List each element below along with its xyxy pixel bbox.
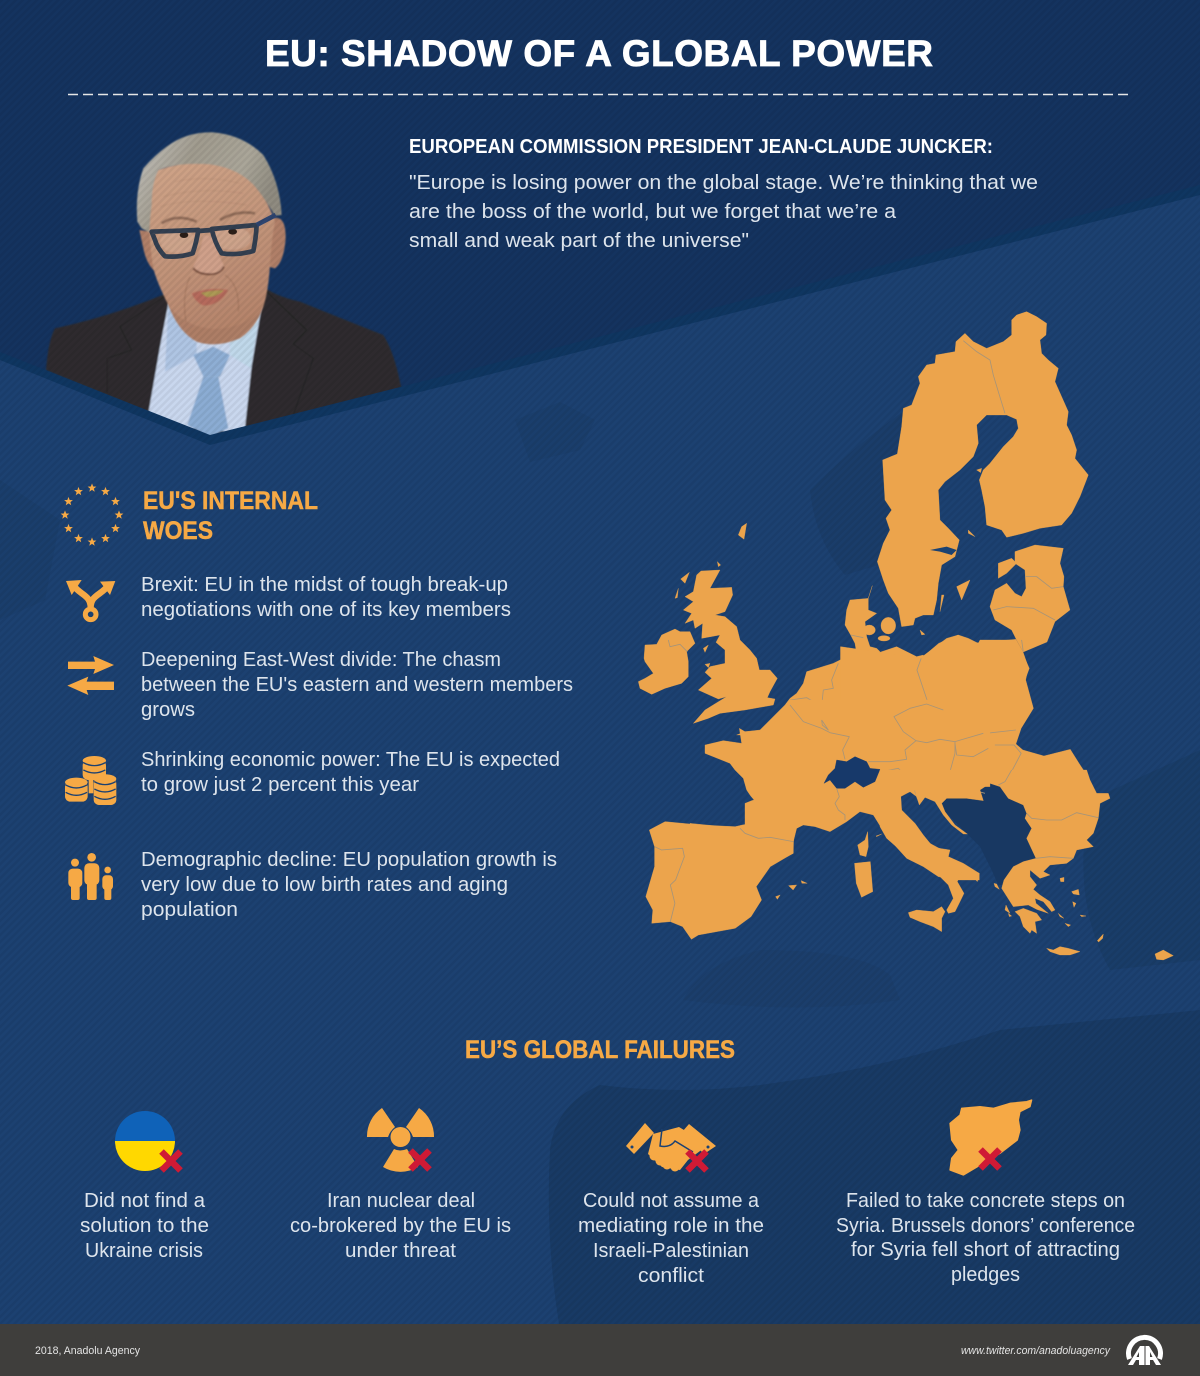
text: Iran	[290, 1190, 511, 1262]
text: Syria	[836, 1190, 1135, 1286]
Poland coast	[917, 635, 1029, 680]
text: Syria: for Syria fell short of attracting	[851, 1239, 1120, 1261]
Britain, Ireland, Low Countries, Denmark	[638, 562, 930, 735]
chevron band	[0, 185, 1200, 450]
quote block: small and weak part of the universe"	[409, 230, 749, 252]
icon: coin stacks	[65, 756, 116, 805]
footer: 2018, Anadolu Agency	[35, 1345, 140, 1357]
icon: people	[68, 853, 113, 900]
quote block: are the boss of the world, but we forget that we’re a	[409, 201, 897, 223]
text: Syria: Syria. Brussels donors’ conference	[836, 1215, 1135, 1237]
text: Iran: co-brokered by the EU is	[290, 1215, 511, 1237]
map of the EU	[638, 312, 1173, 960]
text: East-West divide: between the EU's eastern and western members	[141, 674, 573, 696]
text: Syria: pledges	[951, 1264, 1020, 1286]
text: shrinking economic power	[141, 749, 560, 796]
text: demographic decline	[141, 849, 557, 921]
text: Brexit: Brexit: EU in the midst of tough break-up	[141, 574, 508, 596]
logo: Anadolu Agency	[1128, 1337, 1161, 1365]
text: shrinking economic power: Shrinking economic power: The EU is expected	[141, 749, 560, 771]
text: Brexit: negotiations with one of its key members	[141, 599, 511, 621]
icon: Syria map with cross	[950, 1100, 1032, 1175]
text: Ukraine	[80, 1190, 209, 1262]
text: demographic decline: population	[141, 899, 238, 921]
icon: opposing arrows	[67, 656, 114, 695]
text: East-West divide	[141, 649, 573, 721]
footer	[0, 1324, 1200, 1376]
text: Ukraine: Ukraine crisis	[85, 1240, 203, 1262]
text: Israeli-Palestinian: conflict	[638, 1265, 704, 1287]
text: Israeli-Palestinian: mediating role in the	[578, 1215, 764, 1237]
text: demographic decline: Demographic decline: EU population growth is	[141, 849, 557, 871]
quote block	[409, 136, 1038, 252]
text: East-West divide: grows	[141, 699, 195, 721]
text: Israeli-Palestinian	[578, 1190, 764, 1287]
text: Syria: Failed to take concrete steps on	[846, 1190, 1125, 1212]
text: East-West divide: Deepening East-West divide: The chasm	[141, 649, 501, 671]
text: shrinking economic power: to grow just 2 percent this year	[141, 774, 419, 796]
footer: www.twitter.com/anadoluagency	[961, 1345, 1111, 1357]
portrait: Jean-Claude Juncker	[46, 132, 402, 437]
France, Italy north, Alps	[690, 700, 990, 880]
text: Ukraine: solution to the	[80, 1215, 209, 1237]
faint world map background shapes	[0, 400, 1200, 1330]
quote block: "Europe is losing power on the global stage. We’re thinking that we	[409, 172, 1038, 194]
Scandinavia and Baltics	[738, 312, 1088, 652]
Iberia and eastern central Europe	[646, 635, 1088, 939]
Italy south, Balkans, Greece, islands	[880, 770, 1173, 960]
text: demographic decline: very low due to low birth rates and aging	[141, 874, 508, 896]
heading: EU's global failures: EU’S GLOBAL FAILURES	[465, 1036, 735, 1064]
title: EU: SHADOW OF A GLOBAL POWER	[265, 33, 933, 74]
icon: handshake with cross	[626, 1123, 716, 1172]
background upper section	[0, 0, 1200, 460]
text: Brexit	[141, 574, 511, 621]
heading: EU's internal woes: EU'S INTERNAL	[143, 487, 318, 515]
icon: Ukraine flag circle with cross	[115, 1111, 180, 1171]
icon: radiation with cross	[367, 1108, 434, 1172]
icon: Brexit split arrows	[66, 580, 115, 620]
quote block: EUROPEAN COMMISSION PRESIDENT JEAN-CLAUDE JUNCKER:	[409, 136, 993, 158]
icon: EU stars	[61, 483, 123, 546]
text: Iran: Iran nuclear deal	[327, 1190, 475, 1212]
text: Iran: under threat	[345, 1240, 456, 1262]
non-EU Balkans darker area	[942, 783, 1036, 885]
text: Israeli-Palestinian: Israeli-Palestinian	[593, 1240, 749, 1262]
heading: EU's internal woes	[143, 487, 318, 545]
text: Ukraine: Did not find a	[84, 1190, 206, 1212]
text: Israeli-Palestinian: Could not assume a	[583, 1190, 760, 1212]
heading: EU's internal woes: WOES	[143, 517, 213, 545]
